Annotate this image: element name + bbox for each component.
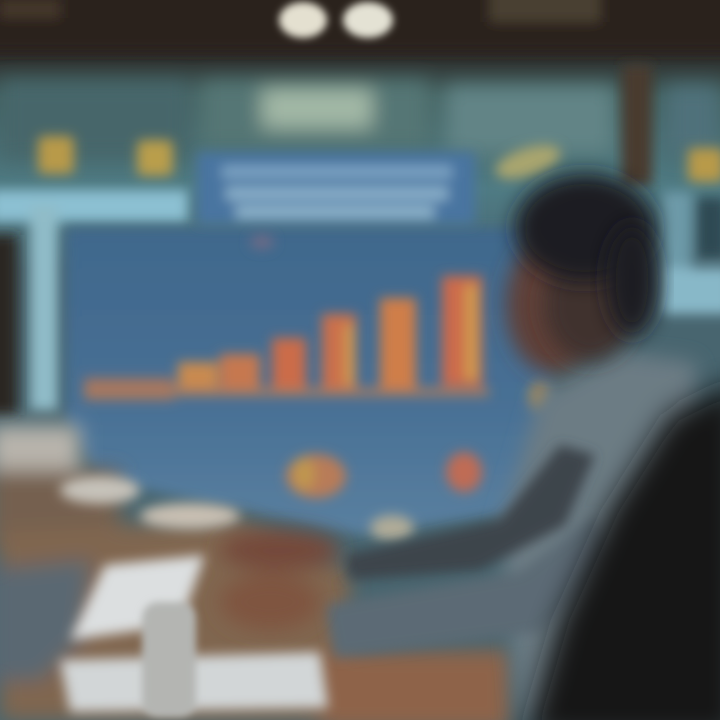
small chart icons — [250, 235, 552, 498]
person: sweater arms — [325, 445, 612, 658]
pale blue frame — [0, 190, 720, 410]
window pillar — [622, 65, 652, 185]
table and papers — [0, 425, 510, 720]
ceiling — [0, 0, 720, 52]
window panels — [0, 80, 720, 160]
foreground dark shoulder — [525, 380, 720, 720]
ceiling lights — [279, 2, 393, 38]
left dark post — [0, 235, 17, 415]
chart board — [66, 228, 560, 535]
bar chart — [84, 276, 489, 400]
papers — [60, 476, 414, 712]
person: hands — [220, 530, 340, 630]
board title plate — [197, 152, 475, 224]
person: sweater — [500, 352, 715, 720]
cup — [142, 602, 196, 717]
person: face and hair — [506, 174, 658, 373]
yellow signs — [38, 136, 720, 186]
